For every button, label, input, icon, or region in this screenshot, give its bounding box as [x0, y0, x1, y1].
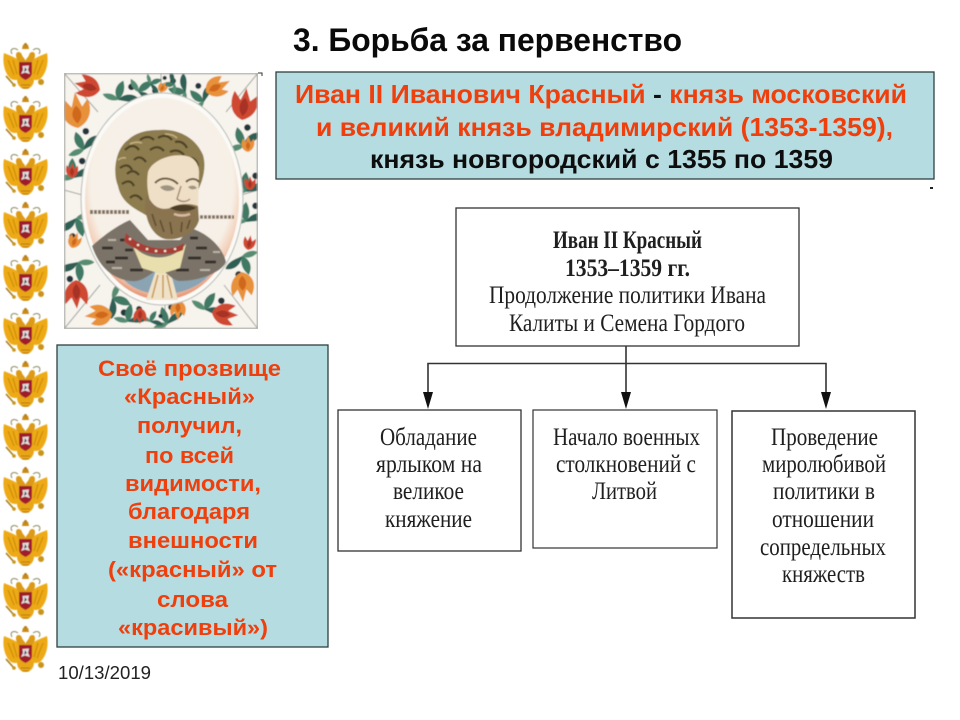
flowers	[74, 74, 100, 98]
diagram box: Lithuania: Начало военных	[553, 424, 700, 451]
nickname text: видимости,	[125, 471, 261, 496]
frame	[64, 74, 258, 328]
diagram	[338, 208, 915, 618]
diagram top box: 1353–1359 гг.	[565, 255, 690, 282]
diagram box: yarlyk: ярлыком на	[376, 451, 482, 478]
foliage	[102, 80, 138, 102]
fur cape	[92, 220, 226, 281]
connector arrows	[423, 346, 831, 409]
diagram box: yarlyk: Обладание	[380, 424, 477, 451]
portrait corner tick	[258, 73, 262, 76]
diagram box: peaceful policy	[732, 411, 915, 618]
nickname text: по всей	[145, 443, 234, 468]
nickname text: внешности	[128, 528, 258, 553]
nickname text: слова	[157, 587, 229, 612]
oval	[81, 93, 243, 305]
diagram box: peaceful policy: Проведение	[771, 424, 878, 451]
diagram box: yarlyk: княжение	[385, 506, 472, 533]
nickname text: «красивый»)	[118, 615, 268, 640]
diagram box: Lithuania: Литвой	[592, 478, 657, 505]
diagram top box: Продолжение политики Ивана	[489, 282, 766, 309]
small mark	[930, 187, 933, 189]
diagram box: peaceful policy: миролюбивой	[762, 451, 886, 478]
diagram box: peaceful policy: политики в	[773, 478, 875, 505]
nickname text: («красный» от	[108, 557, 277, 582]
emblem column	[3, 43, 48, 672]
nickname text: получил,	[137, 413, 242, 438]
shoulders / garment	[124, 272, 210, 294]
nickname text: Своё прозвище	[98, 356, 281, 381]
nickname text: «Красный»	[124, 384, 255, 409]
beard	[145, 194, 199, 239]
date: 10/13/2019	[58, 662, 151, 683]
title: 3. Борьба за первенство	[293, 22, 682, 58]
necklace	[124, 233, 184, 254]
shirt	[132, 244, 186, 274]
diagram box: yarlyk	[338, 410, 521, 551]
diagram box: peaceful policy: отношении	[772, 506, 874, 533]
heading line 1: Иван II Иванович Красный - князь московский	[295, 79, 907, 109]
diagram box: peaceful policy: княжеств	[782, 561, 865, 588]
diagram top box: Иван II Красный	[553, 227, 702, 254]
panel: nickname note	[57, 345, 328, 647]
portrait of Ivan II	[64, 73, 258, 329]
diagram top box	[456, 208, 799, 346]
nickname text	[98, 356, 281, 640]
hair	[115, 130, 204, 218]
inscriptions	[90, 210, 130, 214]
panel: Ivan II title box	[276, 72, 934, 179]
nickname text: благодаря	[128, 499, 250, 524]
diagram box: peaceful policy: сопредельных	[760, 534, 886, 561]
heading line 3: князь новгородский с 1355 по 1359	[370, 144, 833, 174]
face	[146, 154, 200, 210]
diagram box: Lithuania: столкновений с	[556, 451, 696, 478]
diagram box: Lithuania	[533, 410, 717, 548]
diagram top box: Калиты и Семена Гордого	[509, 310, 745, 337]
heading line 2: и великий князь владимирский (1353-1359),	[316, 112, 893, 142]
diagram box: yarlyk: великое	[393, 478, 464, 505]
